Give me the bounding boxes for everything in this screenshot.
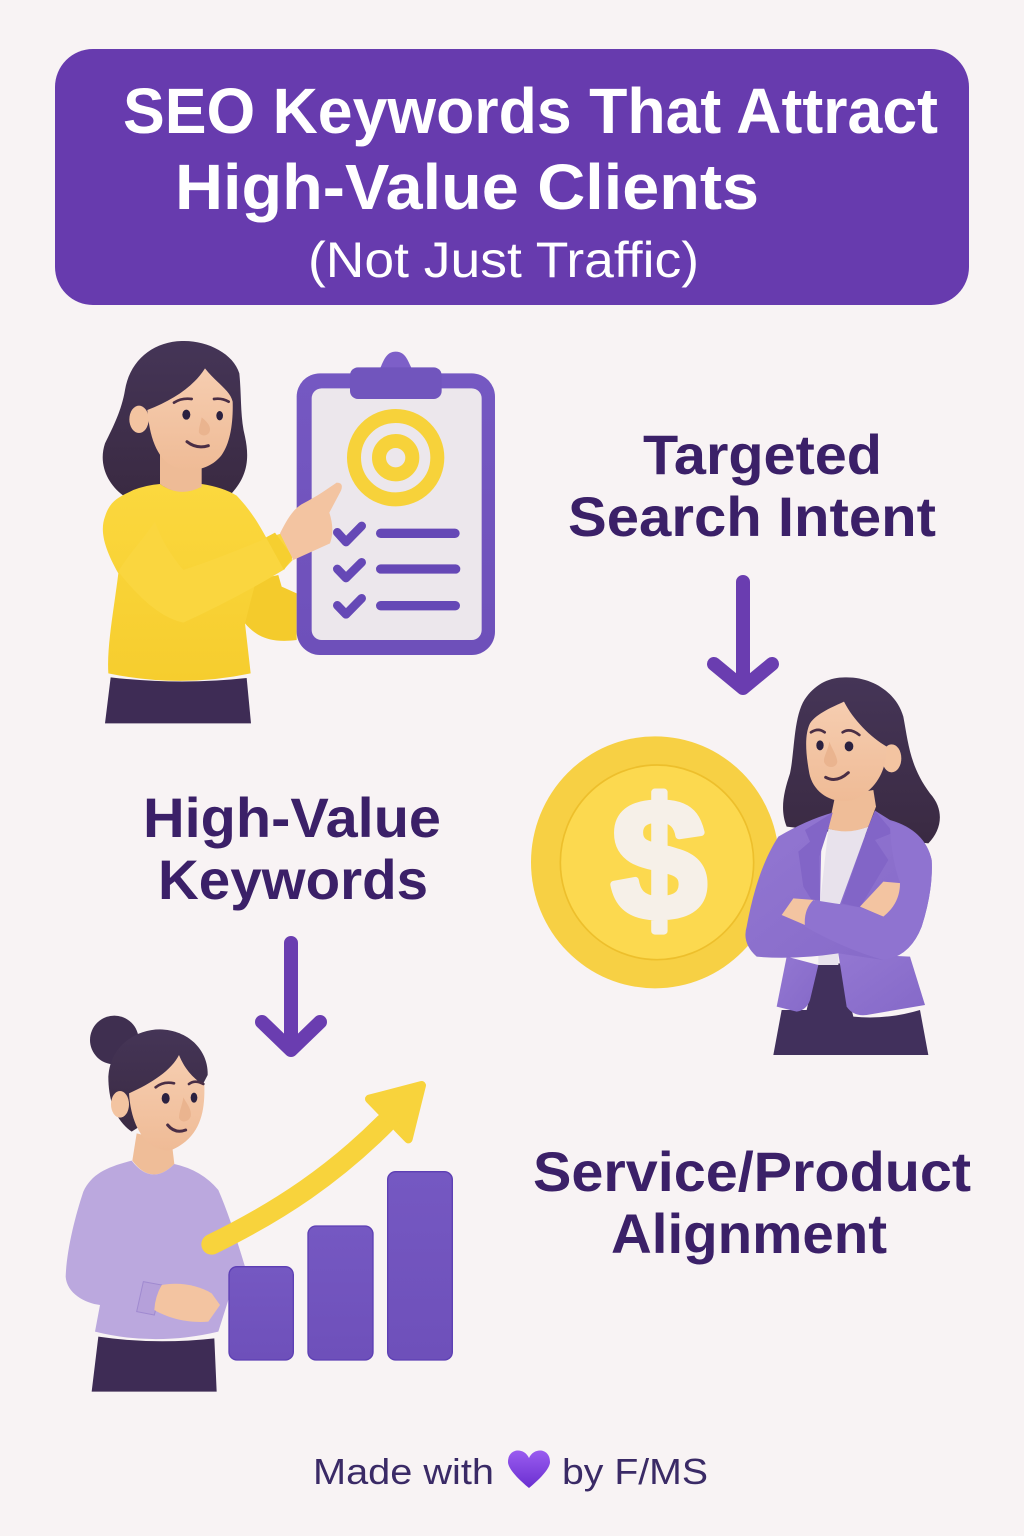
illustration: woman pointing at clipboard with target (103, 341, 495, 723)
pointing arm (118, 522, 293, 623)
skirt (773, 963, 928, 1055)
label: High-Value Keywords: Keywords (158, 848, 428, 911)
facial features (174, 399, 229, 447)
face (129, 1055, 204, 1150)
rising arrow (212, 1085, 422, 1244)
blazer (745, 811, 932, 1015)
neck (132, 1133, 174, 1175)
label: Targeted Search Intent: Search Intent (568, 485, 936, 548)
clipboard (297, 352, 495, 655)
neck (828, 790, 876, 831)
coin (531, 736, 779, 988)
pants (92, 1337, 217, 1392)
pointing hand (280, 483, 342, 560)
icon: heart (508, 1451, 550, 1488)
footer: Made with (313, 1451, 494, 1492)
title line 2: High-Value Clients (175, 151, 759, 223)
facial features (811, 730, 859, 779)
hair (103, 341, 247, 496)
arrow down 1 (714, 582, 772, 688)
left hand (782, 898, 815, 925)
hair bun (90, 1016, 139, 1064)
hand (154, 1284, 220, 1322)
label: Service/Product Alignment: Service/Product (533, 1140, 971, 1203)
neck (160, 453, 202, 492)
hair (783, 677, 940, 843)
sweater (103, 484, 267, 681)
dollar sign: $ (612, 765, 706, 955)
illustration: woman with dollar coin (531, 677, 940, 1055)
title line 1: SEO Keywords That Attract (123, 75, 938, 147)
arrow down 2 (262, 943, 320, 1050)
hair (108, 1029, 208, 1132)
pants (105, 677, 251, 723)
face (806, 702, 887, 801)
facial features (156, 1082, 203, 1131)
illustration: woman with rising bar chart (66, 1016, 452, 1392)
forearm (805, 822, 932, 960)
ear (111, 1091, 129, 1118)
bar chart (229, 1172, 452, 1360)
subtitle: (Not Just Traffic) (308, 232, 699, 288)
footer (313, 1451, 708, 1492)
sweater back arm (240, 575, 297, 641)
cuff (266, 533, 293, 570)
label: Service/Product Alignment (533, 1140, 971, 1265)
checklist (337, 526, 456, 614)
label: Targeted Search Intent (568, 423, 936, 548)
sweater (66, 1161, 245, 1339)
shirt (818, 827, 868, 965)
label: Service/Product Alignment: Alignment (611, 1202, 887, 1265)
right hand (860, 882, 907, 917)
target (354, 416, 437, 499)
label: High-Value Keywords: High-Value (143, 786, 441, 849)
ear (882, 744, 901, 772)
footer: by F/MS (562, 1451, 708, 1492)
label: Targeted Search Intent: Targeted (643, 423, 882, 486)
cuff (137, 1282, 162, 1315)
label: High-Value Keywords (143, 786, 441, 911)
ear (129, 406, 149, 433)
title banner (55, 49, 969, 305)
face (147, 368, 233, 470)
